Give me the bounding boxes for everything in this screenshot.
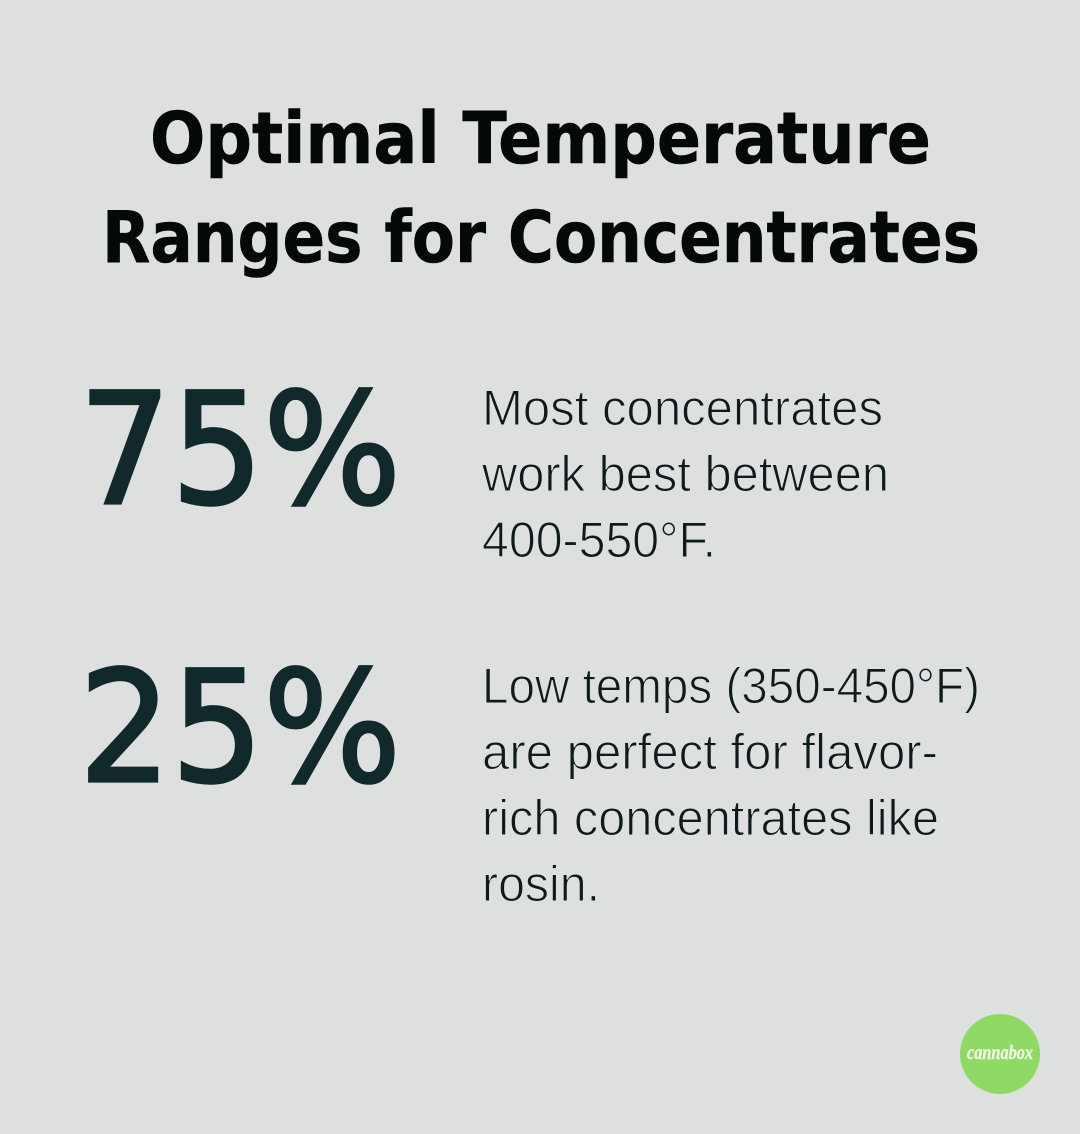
description: 25% stat: are perfect for flavor-: [482, 724, 938, 780]
description: 25% stat: Low temps (350-450°F): [482, 658, 980, 714]
stat: 25%: 25%: [79, 639, 401, 818]
title: [102, 97, 980, 279]
description: 75% stat: 400-550°F.: [482, 512, 716, 568]
description: 25% stat: rich concentrates like: [482, 790, 939, 846]
logo: cannabox badge: [960, 1014, 1040, 1094]
description: 25% stat: [482, 658, 980, 912]
description: 75% stat: work best between: [481, 446, 889, 502]
logo: cannabox badge: cannabox: [967, 1042, 1033, 1064]
title: Optimal Temperature: [150, 97, 931, 180]
description: 75% stat: Most concentrates: [482, 380, 883, 436]
description: 25% stat: rosin.: [482, 856, 600, 912]
stat: 75%: 75%: [79, 361, 401, 540]
title: Ranges for Concentrates: [102, 196, 980, 279]
description: 75% stat: [481, 380, 889, 568]
